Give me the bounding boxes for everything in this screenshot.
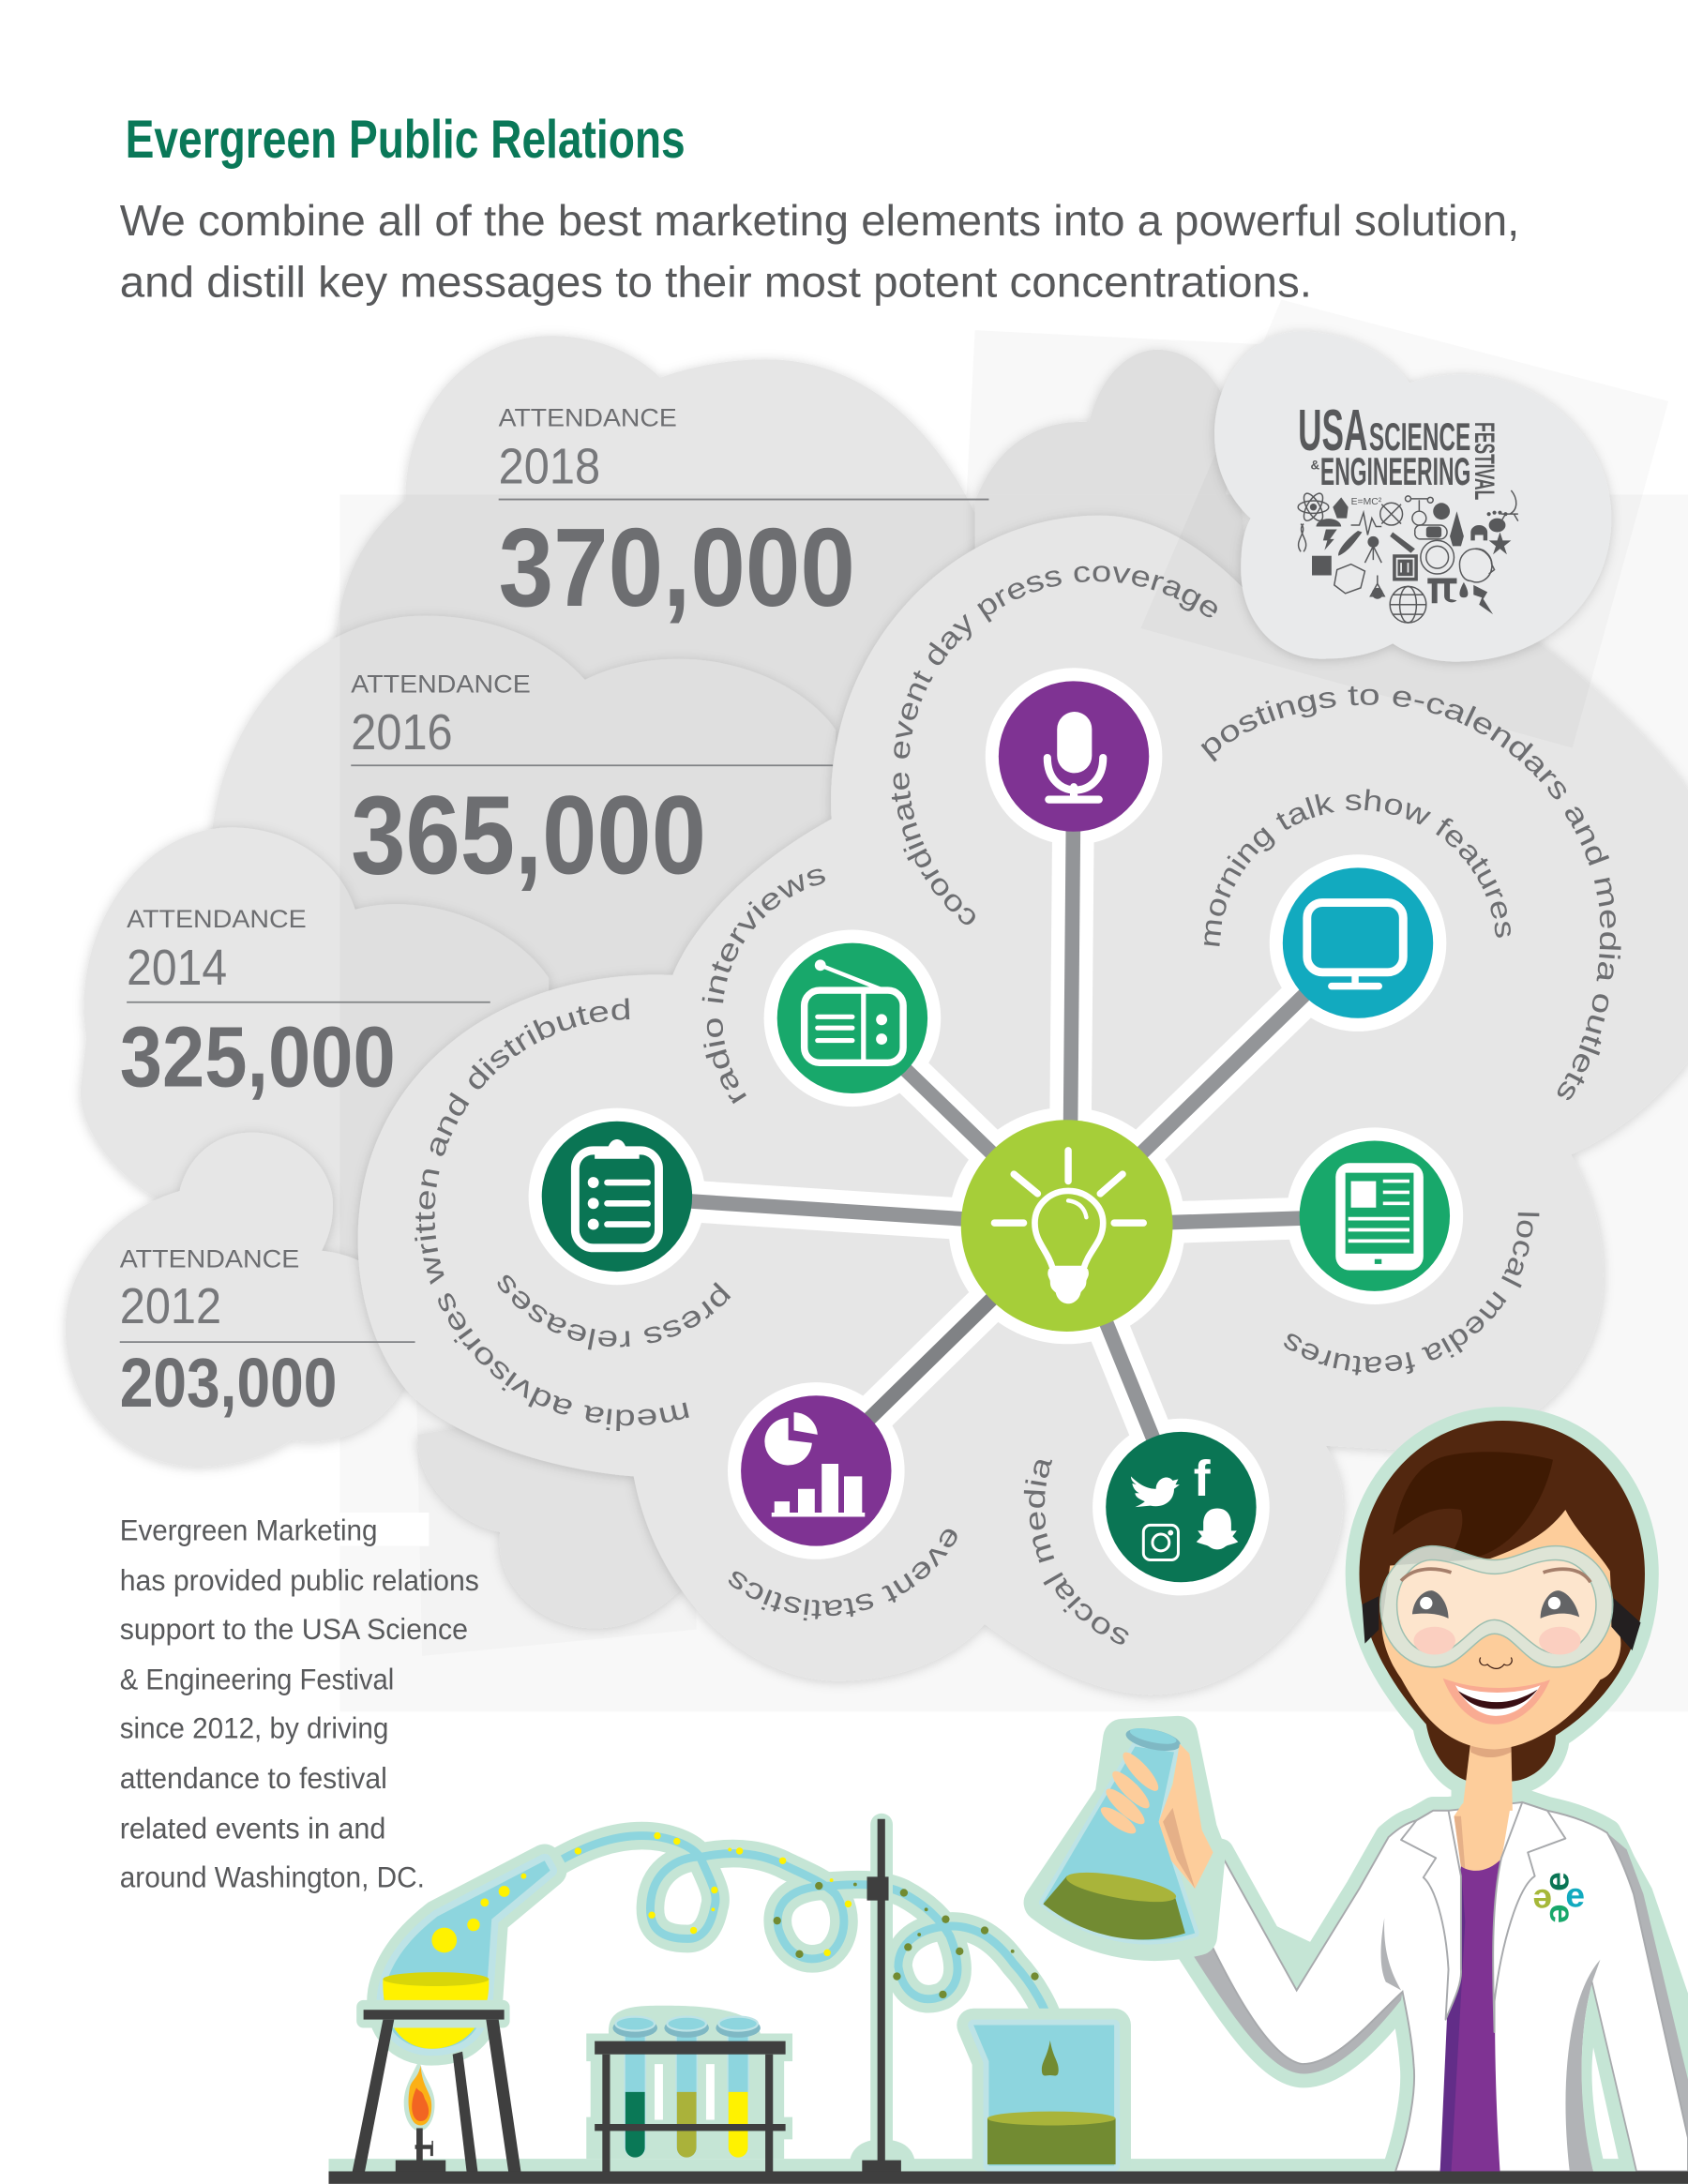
subtitle: We combine all of the best marketing elements into a powerful solution, — [120, 196, 1519, 245]
coat side gap — [1582, 1984, 1636, 2171]
lab: ring stand — [850, 1814, 915, 2173]
stat: 2012: ATTENDANCE — [120, 1245, 299, 1273]
lab: tubing with bubbles — [550, 1832, 1048, 2023]
stat: 2016: 365,000 — [351, 773, 706, 897]
cloud: 2016 attendance — [210, 616, 836, 1114]
icon: twitter bird — [1131, 1476, 1180, 1507]
hand flask lip — [1123, 1725, 1183, 1755]
stat: 2014: 325,000 — [120, 1009, 396, 1106]
scientist — [1043, 1421, 1688, 2171]
evergreen logo on coat: e — [1543, 1904, 1582, 1923]
evergreen logo on coat — [1532, 1872, 1585, 1923]
connector lines from hub — [529, 668, 1463, 1595]
node: social media — [1106, 1432, 1257, 1582]
hand flask liquid — [1043, 1876, 1185, 1939]
cloud: 2018 attendance — [334, 336, 1005, 975]
logo: USA Science and Engineering Festival: SCIENCE — [1369, 414, 1470, 459]
label: local media features: local media features — [1284, 1212, 1540, 1375]
lab: retort flask on tripod — [383, 1860, 550, 2049]
evergreen logo on coat: e — [1532, 1882, 1552, 1921]
stat: 2016: ATTENDANCE — [351, 670, 531, 698]
face — [1381, 1510, 1620, 1749]
icon: facebook f: f — [1194, 1452, 1211, 1507]
lab bench — [328, 2171, 1688, 2184]
goggle strap — [1362, 1596, 1641, 1650]
stat: 2012: 203,000 — [120, 1344, 337, 1422]
stat: 2014 — [120, 905, 490, 1106]
body text: since 2012, by driving — [120, 1712, 388, 1745]
stat: 2012 — [120, 1245, 415, 1422]
cloud: 2012 attendance — [66, 1133, 415, 1467]
goggle lens — [1397, 1560, 1596, 1653]
lab: beaker — [973, 2026, 1116, 2166]
subtitle: and distill key messages to their most potent concentrations. — [120, 257, 1312, 306]
icon: snapchat ghost — [1197, 1509, 1238, 1549]
pale angled panel lower left — [416, 1393, 697, 1656]
body text: related events in and — [120, 1813, 385, 1845]
node: clipboard — [542, 1122, 692, 1272]
body text: has provided public relations — [120, 1564, 479, 1597]
lab: burner and flame — [396, 2060, 445, 2173]
head halo — [1360, 1421, 1645, 1803]
hand flask glass — [1043, 1747, 1195, 1940]
chest skin — [1454, 1803, 1513, 1872]
logo: USA Science and Engineering Festival: E=MC² — [1351, 497, 1382, 507]
body text: around Washington, DC. — [120, 1861, 425, 1894]
stat: 2012: 2012 — [120, 1279, 221, 1334]
logo: USA Science and Engineering Festival: USA — [1298, 399, 1367, 463]
label: postings to e-calendars and media outlets: postings to e-calendars and media outlets — [1200, 686, 1621, 1100]
eyes, brows and cheeks — [1401, 1569, 1590, 1654]
logo: USA Science and Engineering Festival: & — [1311, 459, 1320, 473]
stat: 2018: 2018 — [499, 439, 600, 494]
node: monitor — [1283, 867, 1433, 1018]
node: radio — [777, 943, 927, 1093]
lab: tripod stand — [353, 2000, 520, 2171]
body text: attendance to festival — [120, 1762, 387, 1795]
coat halo — [1183, 1802, 1688, 2171]
hair — [1360, 1421, 1645, 1782]
coat fold and pocket shade — [1381, 1918, 1600, 2171]
logo: USA Science and Engineering Festival: FESTIVAL — [1469, 422, 1500, 500]
coat body — [1191, 1802, 1688, 2171]
stat: 2018: ATTENDANCE — [499, 404, 677, 432]
evergreen logo on coat: e — [1536, 1872, 1575, 1891]
stat: 2016: 2016 — [351, 705, 453, 761]
pale angled panel top — [967, 330, 1259, 494]
body text: & Engineering Festival — [120, 1664, 394, 1696]
lab scene: halo ground strip — [328, 2159, 1688, 2173]
pale background panel — [339, 494, 1688, 1711]
stat: 2018: 370,000 — [499, 505, 855, 630]
white patch behind text — [339, 1513, 429, 1546]
goggles — [1380, 1546, 1613, 1667]
nose — [1480, 1657, 1512, 1668]
coat arm and side shadow — [1183, 1833, 1688, 2138]
subtitle — [120, 196, 1519, 306]
flask and hand halo — [1043, 1736, 1206, 1941]
label: coordinate event day press coverage: coordinate event day press coverage — [891, 565, 1217, 925]
label: morning talk show features: morning talk show features — [1204, 789, 1511, 946]
hand — [1159, 1744, 1213, 1889]
evergreen logo on coat: e — [1565, 1875, 1585, 1914]
cloud: 2014 attendance — [81, 827, 549, 1337]
icon: instagram — [1143, 1525, 1178, 1560]
pale angled panel behind logo — [1140, 299, 1668, 748]
label: radio interviews: radio interviews — [701, 868, 825, 1105]
body text: support to the USA Science — [120, 1613, 468, 1646]
neck — [1462, 1741, 1513, 1811]
dark hair highlight — [1393, 1452, 1553, 1561]
logo: USA Science and Engineering Festival — [1298, 399, 1518, 623]
stat: 2014: ATTENDANCE — [127, 905, 307, 933]
body text — [120, 1514, 479, 1894]
node: microphone — [999, 681, 1149, 832]
cloud: main central cloud — [358, 516, 1688, 1695]
purple shirt — [1440, 1859, 1501, 2171]
lapels — [1401, 1811, 1461, 2020]
stat: 2016 — [351, 670, 833, 897]
label: media advisories written and distributed: media advisories written and distributed — [414, 998, 689, 1431]
label: press releases: press releases — [497, 1275, 731, 1350]
hub: idea light bulb — [961, 1120, 1172, 1332]
cloud: lower back lobes — [417, 1393, 683, 1628]
stat: 2018 — [499, 404, 988, 630]
title: Evergreen Public Relations — [126, 110, 686, 170]
stat: 2014: 2014 — [127, 941, 227, 996]
lab: test tube rack — [586, 2006, 792, 2173]
label: event statistics: event statistics — [729, 1529, 957, 1620]
logo: USA Science and Engineering Festival: ENGINEERING — [1320, 449, 1470, 493]
label: social media: social media — [1024, 1459, 1129, 1645]
node: tablet — [1300, 1140, 1450, 1291]
body text: Evergreen Marketing — [120, 1514, 377, 1547]
mouth — [1443, 1679, 1550, 1725]
cloud: back bumps behind logo — [975, 350, 1254, 626]
node: statistics — [741, 1395, 891, 1546]
logo cloud — [1214, 332, 1611, 662]
